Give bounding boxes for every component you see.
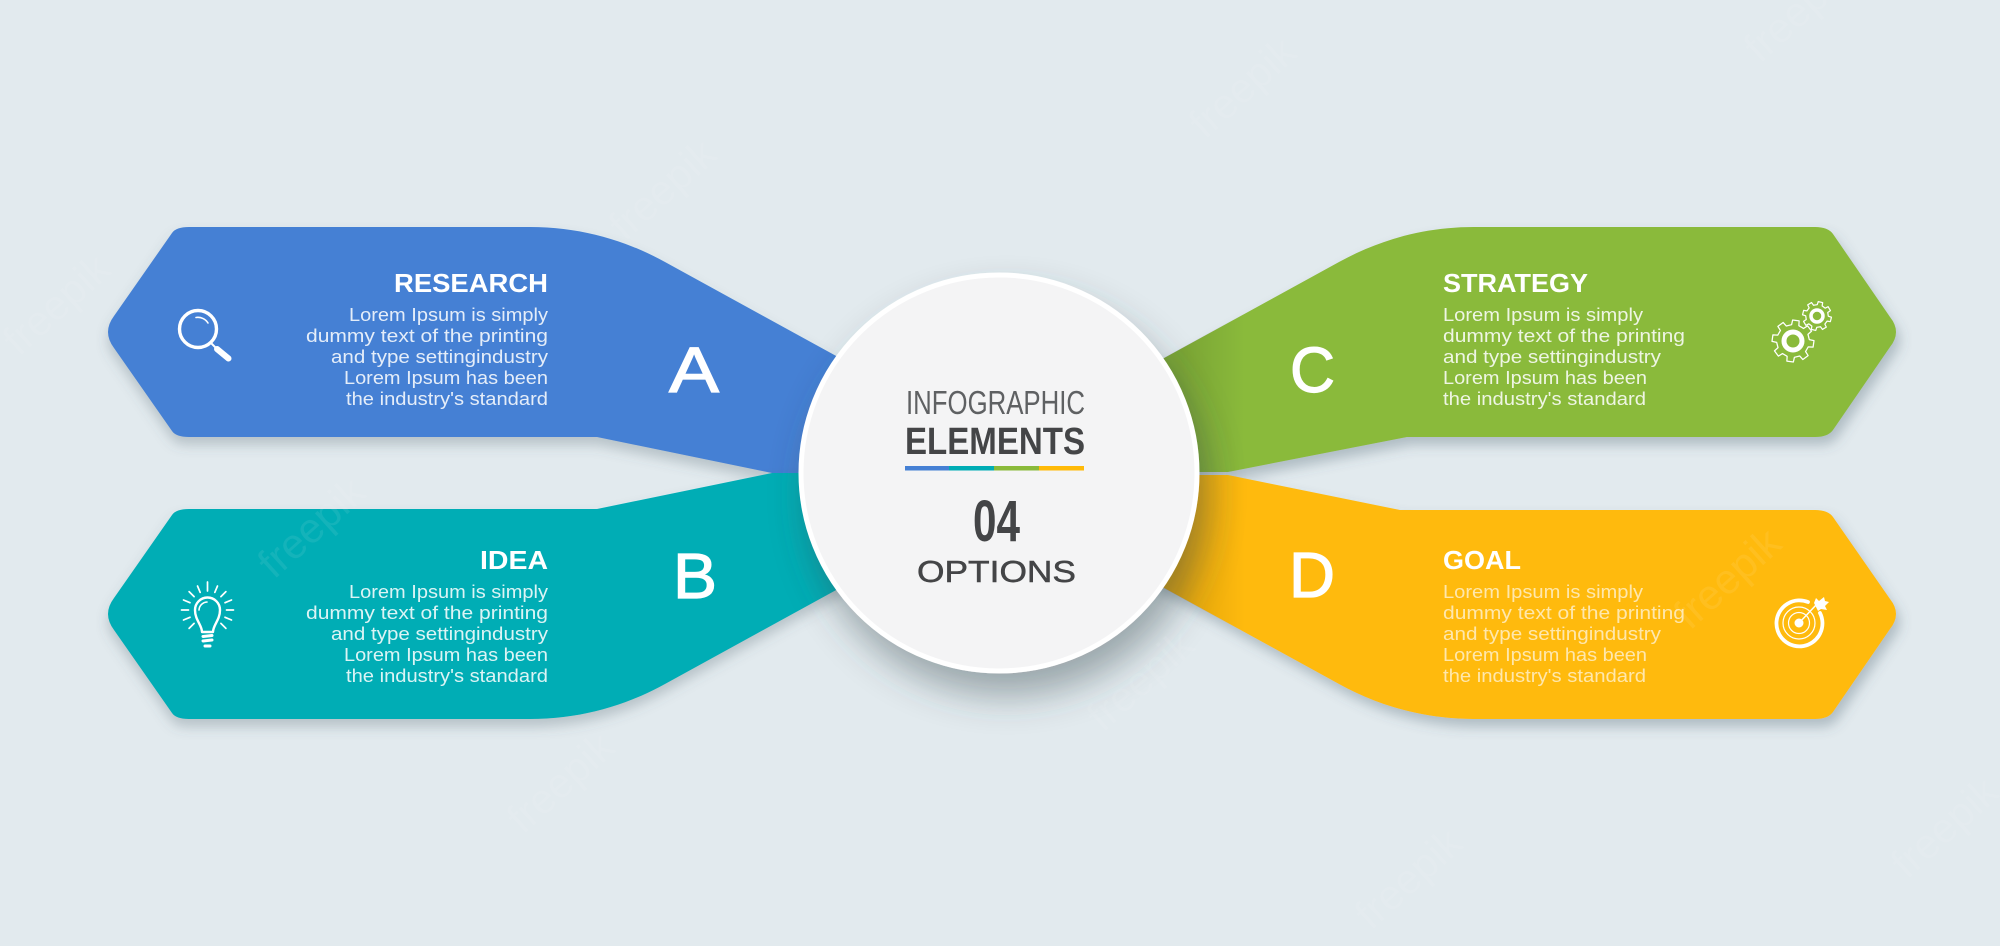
text block: goal body: Lorem Ipsum is simply	[1443, 582, 1643, 602]
text block: research body: and type settingindustry	[331, 347, 548, 367]
text block: research body: dummy text of the printing	[306, 326, 548, 346]
letter D: D	[1289, 539, 1335, 611]
watermark: freepik	[249, 467, 374, 587]
text block: idea body: dummy text of the printing	[306, 603, 548, 623]
text block: research body	[306, 305, 548, 409]
text block: idea body: Lorem Ipsum is simply	[349, 582, 548, 602]
text block: goal body: the industry's standard	[1443, 666, 1646, 686]
shaded edge near circle	[1160, 475, 1245, 633]
text block: strategy body: the industry's standard	[1443, 389, 1646, 409]
heading: idea: IDEA	[480, 545, 548, 575]
shaded edge near circle	[1160, 313, 1245, 472]
watermark: freepik	[1346, 818, 1471, 938]
panel shape: blue arrow	[108, 227, 900, 473]
title: infographic: INFOGRAPHIC	[906, 384, 1085, 421]
text block: research body: the industry's standard	[346, 389, 548, 409]
center circle	[801, 275, 1197, 671]
watermark: freepik	[498, 722, 623, 842]
panel shape: teal arrow	[108, 473, 900, 719]
text block: strategy body: Lorem Ipsum is simply	[1443, 305, 1643, 325]
heading: goal: GOAL	[1443, 545, 1521, 575]
heading: research: RESEARCH	[394, 268, 548, 298]
text block: strategy body: dummy text of the printing	[1443, 326, 1685, 346]
text block: goal body: and type settingindustry	[1443, 624, 1661, 644]
number 04: 04	[973, 489, 1020, 554]
icon: gears	[1770, 299, 1834, 364]
icon: target	[1776, 597, 1829, 646]
circle disc	[801, 275, 1197, 671]
panel shape: yellow arrow	[1104, 475, 1896, 719]
icon: magnifier	[180, 310, 228, 358]
heading: strategy: STRATEGY	[1443, 268, 1588, 298]
colour bar	[905, 466, 1084, 470]
watermark: freepik	[600, 129, 725, 249]
title: elements: ELEMENTS	[905, 421, 1085, 463]
text block: research body: Lorem Ipsum is simply	[349, 305, 548, 325]
text block: idea body: Lorem Ipsum has been	[344, 645, 548, 665]
panel: B idea	[108, 473, 900, 719]
text block: strategy body	[1443, 305, 1685, 409]
text block: idea body: and type settingindustry	[331, 624, 548, 644]
text block: research body: Lorem Ipsum has been	[344, 368, 548, 388]
panel: C strategy	[1104, 227, 1896, 472]
letter C: C	[1290, 334, 1335, 406]
watermark: freepik	[1665, 518, 1790, 638]
watermark: freepik	[1180, 27, 1305, 147]
panel: A research	[108, 227, 900, 473]
text block: idea body	[306, 582, 548, 686]
letter A: A	[669, 334, 719, 406]
text block: strategy body: and type settingindustry	[1443, 347, 1661, 367]
text block: goal body: dummy text of the printing	[1443, 603, 1685, 623]
text block: idea body: the industry's standard	[346, 666, 548, 686]
text block: strategy body: Lorem Ipsum has been	[1443, 368, 1647, 388]
panel: D goal	[1104, 475, 1896, 719]
text block: goal body: Lorem Ipsum has been	[1443, 645, 1647, 665]
watermark: freepik	[1078, 620, 1203, 740]
letter B: B	[673, 540, 717, 612]
text block: goal body	[1443, 582, 1685, 686]
panel shape: green arrow	[1104, 227, 1896, 472]
label: options: OPTIONS	[917, 554, 1076, 589]
icon: light bulb	[182, 582, 234, 646]
